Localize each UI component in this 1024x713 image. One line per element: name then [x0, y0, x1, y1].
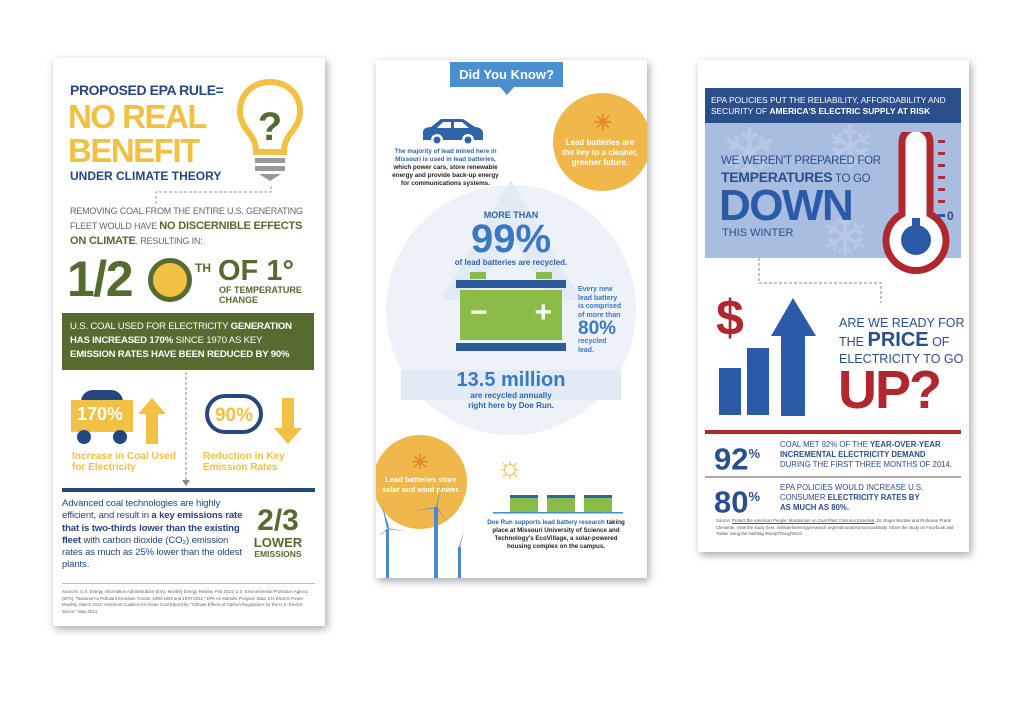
- icon: light bulb with question mark: ?: [258, 105, 282, 149]
- icon: light bulb with question mark: [237, 79, 303, 181]
- heading: UP?: UP?: [838, 360, 940, 420]
- icon: coal cart 170%: [71, 390, 166, 444]
- stat: 80%: 80%: [714, 484, 760, 519]
- stat: 1/20th of 1 degree: OF 1°: [218, 255, 294, 287]
- text: advanced coal technologies: Advanced coal technologies are highly efficient, and result in a key emissions rate that is two-thirds lower than the existing fleet with carbon dioxide (CO₂) emission rates as much as 25% lower than the oldest plants.: [62, 498, 242, 570]
- icon: thermometer: [882, 132, 954, 274]
- icon: coal cart 170%: 170%: [77, 404, 123, 424]
- stat: 92%: COAL MET 92% OF THE YEAR-OVER-YEAR: [780, 440, 941, 449]
- stat: 1/20th of 1 degree: [67, 251, 302, 307]
- icon: battery: −: [470, 296, 488, 329]
- icon: car: [423, 119, 483, 144]
- text: 80% recycled lead: lead.: [578, 346, 594, 354]
- stat: 2/3 lower emissions: [254, 504, 302, 559]
- panel: temperatures down: WE WEREN'T PREPARED FOR: [721, 155, 881, 167]
- heading: did you know: Did You Know?: [459, 67, 554, 82]
- header bar: [705, 88, 961, 123]
- stat: 80%: AS MUCH AS 80%.: [780, 503, 849, 512]
- background recycle arrows: [386, 180, 636, 435]
- text: majority of lead mined: The majority of lead mined here in Missouri is used in lead batteries, which power cars, store renewable energy and provide back-up energy for communications systems.: [392, 148, 499, 187]
- label: increase in coal: Increase in Coal Used: [72, 451, 176, 462]
- text: price to go up: THE PRICE OF: [839, 329, 949, 351]
- icon: dollar with rising bars: [716, 290, 816, 416]
- text: 80% recycled lead: of more than: [578, 312, 620, 318]
- icon: sun: ☼: [496, 451, 524, 484]
- text: 80% recycled lead: is comprised: [578, 303, 621, 310]
- callout: orange circle cleaner future: ☀: [593, 110, 613, 135]
- panel: temperatures down: THIS WINTER: [722, 227, 794, 239]
- stat: 92%: DURING THE FIRST THREE MONTHS OF 2014.: [780, 460, 952, 469]
- callout: orange circle cleaner future: Lead batteries are the key to a cleaner, greener future.: [562, 138, 638, 167]
- icon: cloud 90%: [205, 394, 302, 444]
- heading: no real benefit: [68, 98, 206, 169]
- stat: 92%: INCREMENTAL ELECTRICITY DEMAND: [780, 450, 926, 459]
- callout: coal generation increased: U.S. COAL USED FOR ELECTRICITY GENERATION HAS INCREASED 170% SINCE 1970 AS KEY EMISSION RATES HAVE BEEN REDUCED BY 90%: [70, 321, 292, 360]
- icon: dollar with rising bars: $: [716, 290, 744, 346]
- stat: 13.5 million: right here by Doe Run.: [468, 401, 554, 410]
- panel: temperatures down: DOWN: [719, 181, 852, 230]
- stat: 80%: [714, 483, 923, 519]
- stat: 13.5 million: 13.5 million: [457, 369, 565, 391]
- label: reduction in emissions: Reduction in Key: [203, 451, 285, 462]
- panel: did you know lead batteries: [376, 60, 647, 578]
- panel: EPA rule no real benefit: [53, 58, 325, 626]
- text: price to go up: ARE WE READY FOR: [839, 316, 964, 330]
- stat: 2/3 lower emissions: EMISSIONS: [254, 549, 302, 559]
- text: price to go up: ELECTRICITY TO GO: [839, 352, 963, 366]
- stat: 1/20th of 1 degree: CHANGE: [219, 295, 258, 305]
- stat: 80%: CONSUMER ELECTRICITY RATES BY: [780, 493, 920, 502]
- text: price to go up: [839, 316, 964, 366]
- panel: temperatures down: TEMPERATURES TO GO: [721, 169, 870, 185]
- text: removing coal: REMOVING COAL FROM THE ENTIRE U.S. GENERATING FLEET WOULD HAVE NO DISCERNIBLE EFFECTS ON CLIMATE, RESULTING IN:: [70, 206, 303, 247]
- stat: 13.5 million: [457, 369, 565, 410]
- text: source: Source: Protect the American People: Moratorium on Coal Plant Closures Essential, Dr. Roger Bezdek and Professor Frank Clemente. View the study here: instituteforenergyresearch.org/endmoratoriumoncoalstudy. Share the study on Facebook and Twitter using the hashtag #KeepTheLightsOn.: [716, 518, 954, 536]
- label: reduction in emissions: Emission Rates: [203, 462, 277, 473]
- stat: 1/20th of 1 degree: TH: [195, 261, 211, 275]
- panel: temperatures down: [705, 123, 961, 258]
- header bar: EPA POLICIES PUT THE RELIABILITY, AFFORDABILITY AND SECURITY OF AMERICA'S ELECTRIC SUPPLY AT RISK: [711, 95, 946, 116]
- icon: wind turbines: [380, 485, 464, 578]
- stat: 80%: EPA POLICIES WOULD INCREASE U.S.: [780, 483, 923, 492]
- callout: orange circle solar wind: ☀: [411, 452, 429, 474]
- icon: thermometer: 0: [947, 209, 954, 223]
- heading: under climate theory: UNDER CLIMATE THEORY: [70, 169, 221, 183]
- stat: 2/3 lower emissions: LOWER: [254, 535, 302, 550]
- text: 80% recycled lead: 80%: [578, 318, 616, 339]
- stat: 99% recycled: 99%: [471, 217, 551, 261]
- panel: electric supply at risk: [698, 60, 969, 552]
- stat: 1/20th of 1 degree: 1/2: [67, 251, 132, 307]
- text: 80% recycled lead: Every new: [578, 286, 613, 293]
- callout: orange circle solar wind: Lead batteries store solar and wind power.: [382, 475, 460, 494]
- text: 80% recycled lead: [578, 286, 621, 354]
- callout: orange circle solar wind: [373, 435, 467, 529]
- heading: proposed EPA rule: PROPOSED EPA RULE=: [70, 82, 223, 98]
- text: 80% recycled lead: recycled: [578, 338, 606, 345]
- stat: 99% recycled: MORE THAN: [484, 210, 538, 220]
- heading: no real benefit: NO REAL: [68, 98, 206, 135]
- text: 80% recycled lead: lead battery: [578, 294, 617, 302]
- callout: coal generation increased: [62, 313, 314, 370]
- stat: 2/3 lower emissions: 2/3: [257, 504, 299, 537]
- text: doe run supports research: Doe Run supports lead battery research taking place at Missouri University of Science and Technology's EcoVillage, a solar-powered housing complex on the campus.: [487, 519, 625, 550]
- stat: 92%: [714, 440, 952, 476]
- stat: 1/20th of 1 degree: OF TEMPERATURE: [219, 285, 302, 295]
- stat: 99% recycled: [455, 210, 567, 267]
- callout: orange circle cleaner future: [553, 93, 651, 191]
- text: sources: Sources: U.S. Energy Information Administration (EIA), Monthly Energy Review, Feb 2014; U.S. Environmental Protection Agency (EPA), "National Air Pollutant Emission Trends, 1900-1998 and 1970-2012;" EPA Air Markets Program Data; EIA Electric Power Monthly, March 2014. American Coalition for Clean Coal Electricity, "Climate Effects of Carbon Regulations for the U.S. Electric Sector," May 2014.: [62, 589, 308, 614]
- stat: 99% recycled: of lead batteries are recycled.: [455, 258, 567, 267]
- label: reduction in emissions: [203, 451, 285, 473]
- icon: cloud 90%: 90%: [215, 405, 253, 426]
- heading: did you know: [450, 62, 563, 87]
- icon: battery: [456, 272, 566, 351]
- icon: battery: +: [534, 296, 552, 329]
- stat: 13.5 million: are recycled annually: [470, 391, 552, 400]
- label: increase in coal: [72, 451, 176, 473]
- heading: no real benefit: BENEFIT: [68, 132, 199, 169]
- label: increase in coal: for Electricity: [72, 462, 136, 473]
- stat: 92%: 92%: [714, 441, 760, 476]
- icon: ecovillage houses: [493, 495, 623, 514]
